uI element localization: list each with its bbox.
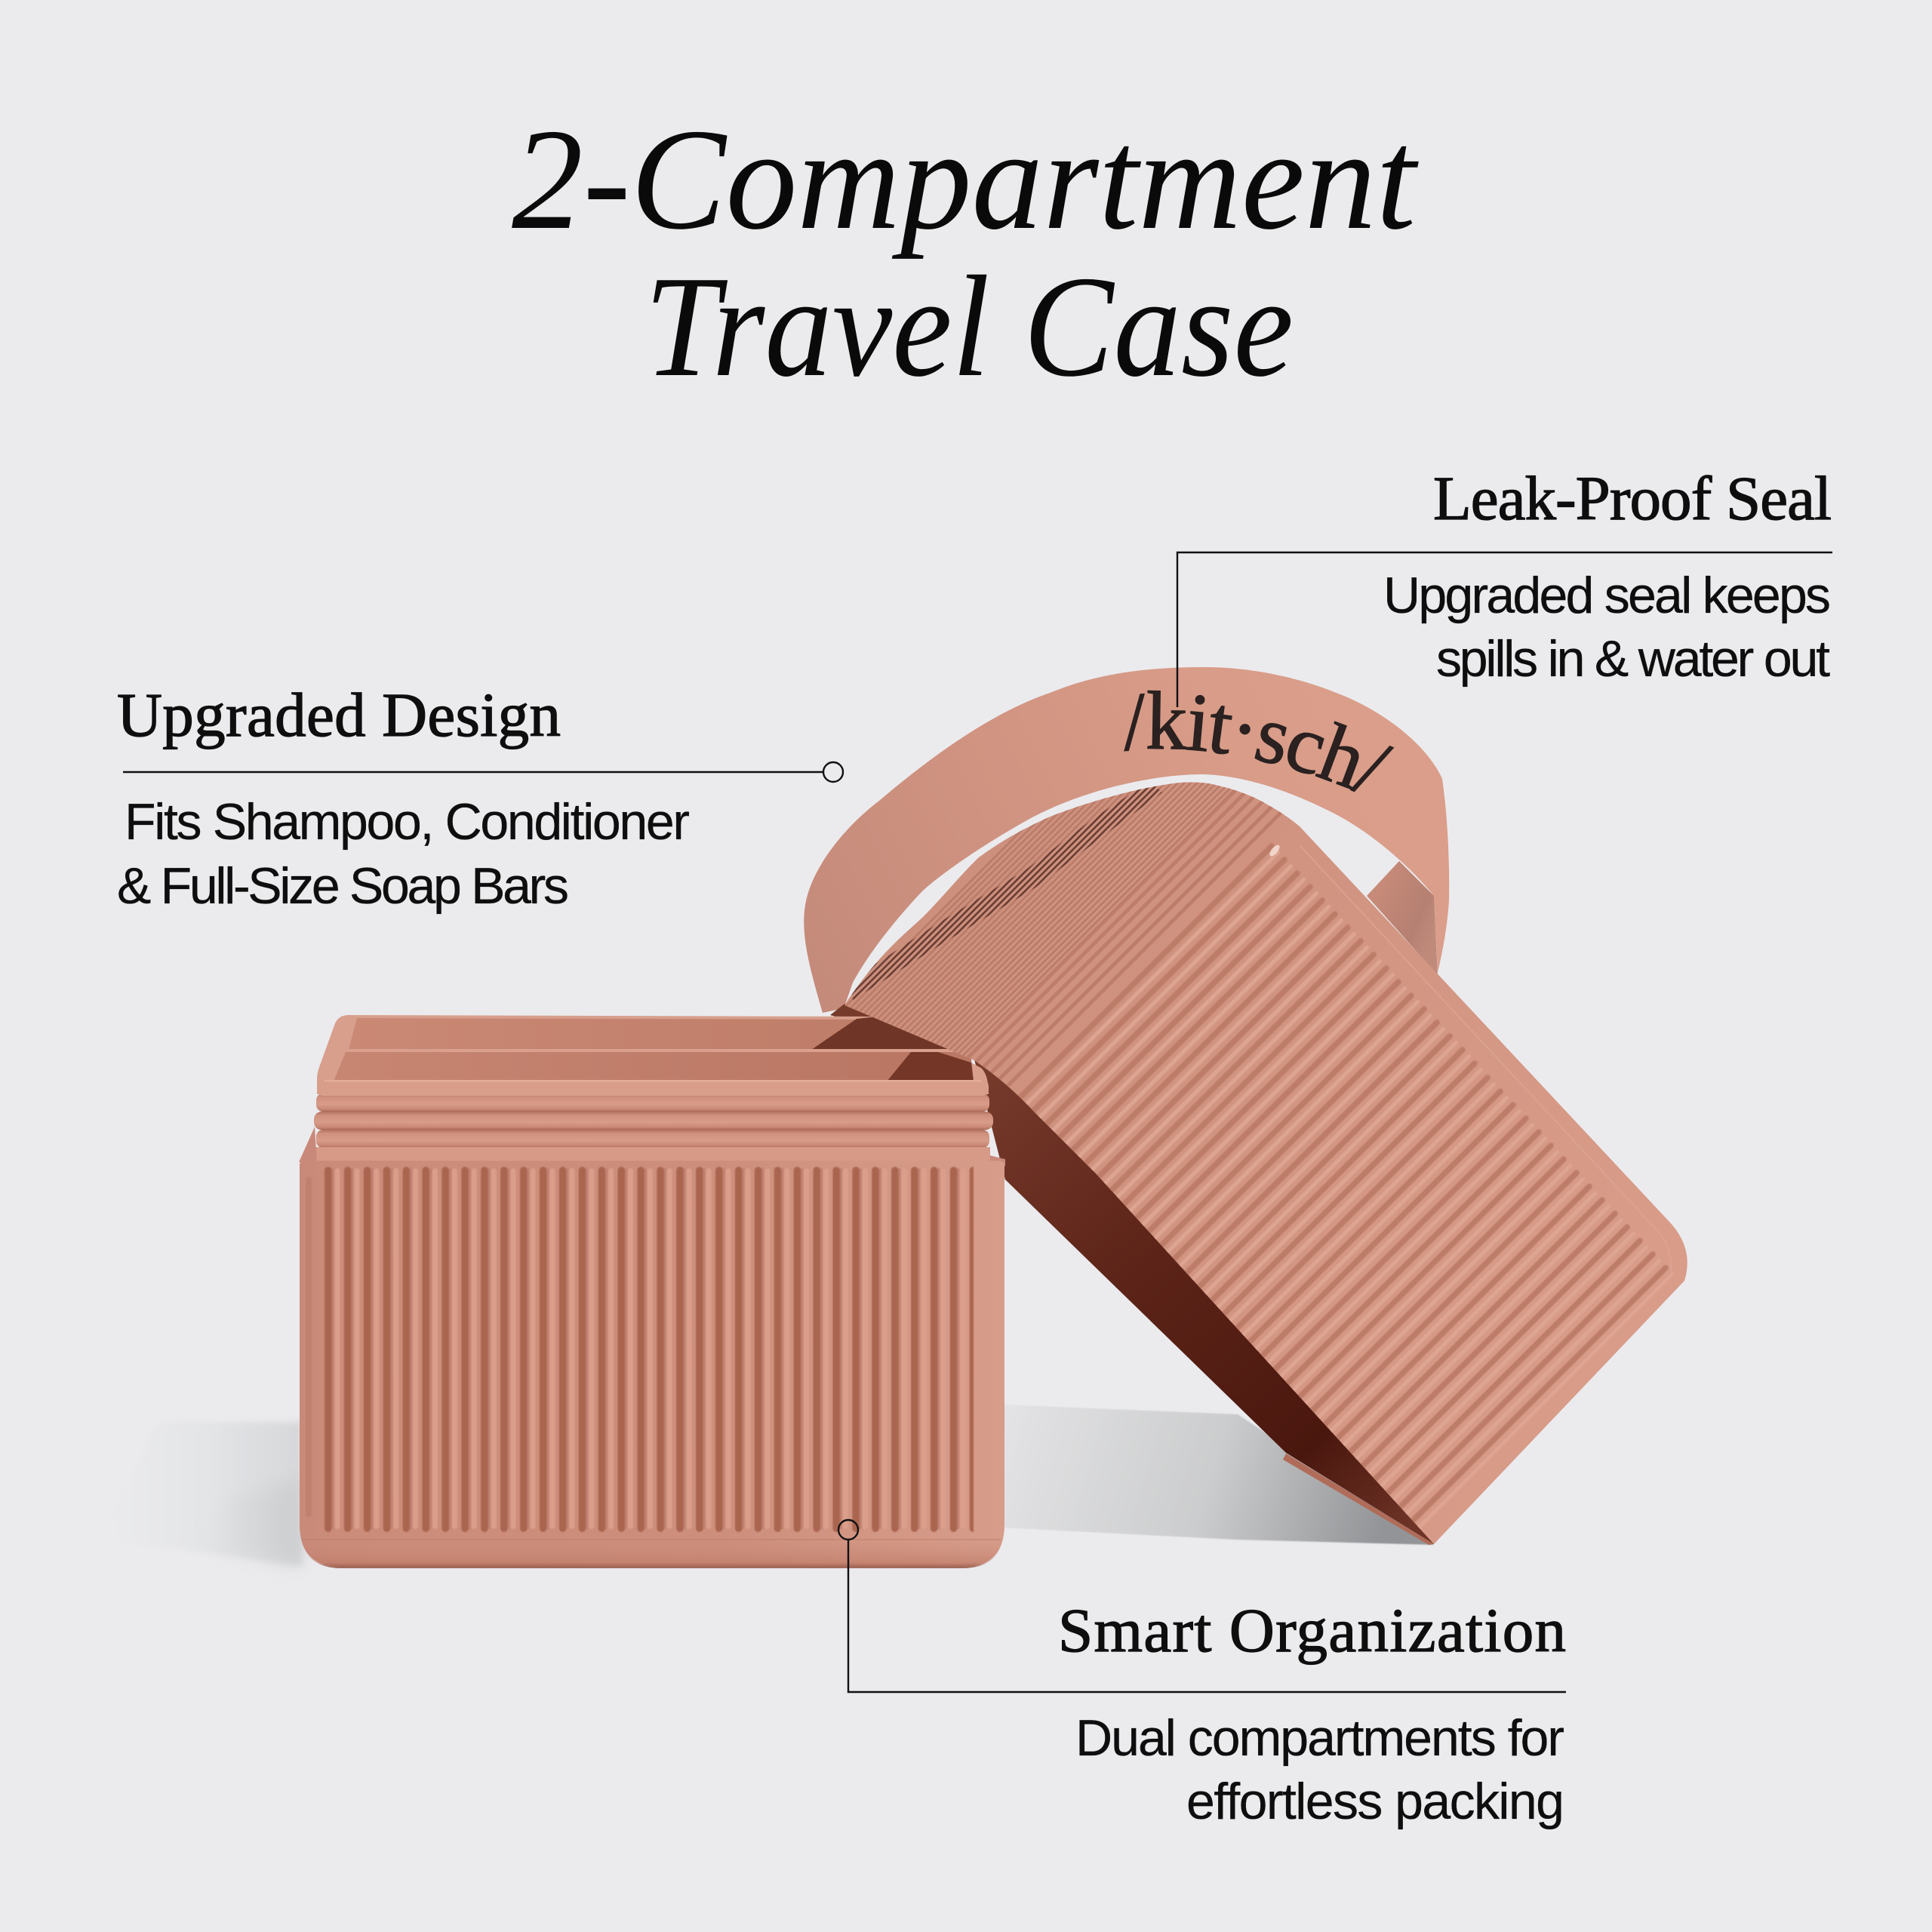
callout: upgraded design xyxy=(117,680,843,915)
title: 2-Compartment xyxy=(512,99,1420,260)
heading: Leak-Proof Seal xyxy=(1433,463,1832,533)
neck xyxy=(315,1147,990,1167)
leader line xyxy=(1177,552,1832,707)
description: spills in & water out xyxy=(1436,630,1830,688)
title xyxy=(512,99,1420,407)
heading: Upgraded Design xyxy=(117,680,561,749)
strap band xyxy=(804,667,1449,1013)
floor shadows xyxy=(98,1404,1434,1566)
moire band xyxy=(849,781,1162,1000)
container neck xyxy=(314,1015,993,1167)
back compartment xyxy=(349,1018,906,1050)
strap logo: /kit·sch/ xyxy=(1124,690,1395,792)
divider xyxy=(344,1049,971,1052)
description xyxy=(1075,1709,1564,1830)
description: effortless packing xyxy=(1186,1773,1564,1830)
description xyxy=(117,793,690,915)
leader line with marker xyxy=(838,1520,1566,1692)
front compartment xyxy=(334,1052,974,1081)
description: Fits Shampoo, Conditioner xyxy=(125,793,690,851)
medium ribs xyxy=(966,789,1283,1087)
coarse ribs xyxy=(1018,843,1673,1529)
leader line with marker xyxy=(123,762,843,782)
lid face xyxy=(844,782,1687,1544)
back compartment shadow xyxy=(811,1016,974,1060)
lid lip xyxy=(1283,1454,1434,1545)
fine ribs xyxy=(845,782,1231,1056)
description: & Full-Size Soap Bars xyxy=(117,857,569,915)
product: open case xyxy=(299,667,1687,1568)
heading: Smart Organization xyxy=(1058,1595,1566,1665)
base side edges xyxy=(299,1127,1005,1166)
callout: leak-proof seal xyxy=(1177,463,1832,707)
description: Dual compartments for xyxy=(1075,1709,1564,1767)
threads xyxy=(316,1094,989,1112)
description: Upgraded seal keeps xyxy=(1383,567,1831,624)
lid ribs xyxy=(845,782,1673,1529)
callout: smart organization xyxy=(838,1520,1566,1830)
strap inner back piece xyxy=(1367,861,1438,975)
base body xyxy=(300,1161,1004,1567)
lid edge margin xyxy=(1300,845,1671,1275)
front rim xyxy=(317,1080,989,1096)
lid interior xyxy=(830,1004,1438,1544)
rim outer xyxy=(317,1015,989,1094)
lid specular xyxy=(1268,844,1281,857)
description xyxy=(1383,567,1831,688)
front compartment shadow xyxy=(887,1052,974,1081)
title: Travel Case xyxy=(645,246,1294,407)
base ribs xyxy=(323,1167,974,1532)
